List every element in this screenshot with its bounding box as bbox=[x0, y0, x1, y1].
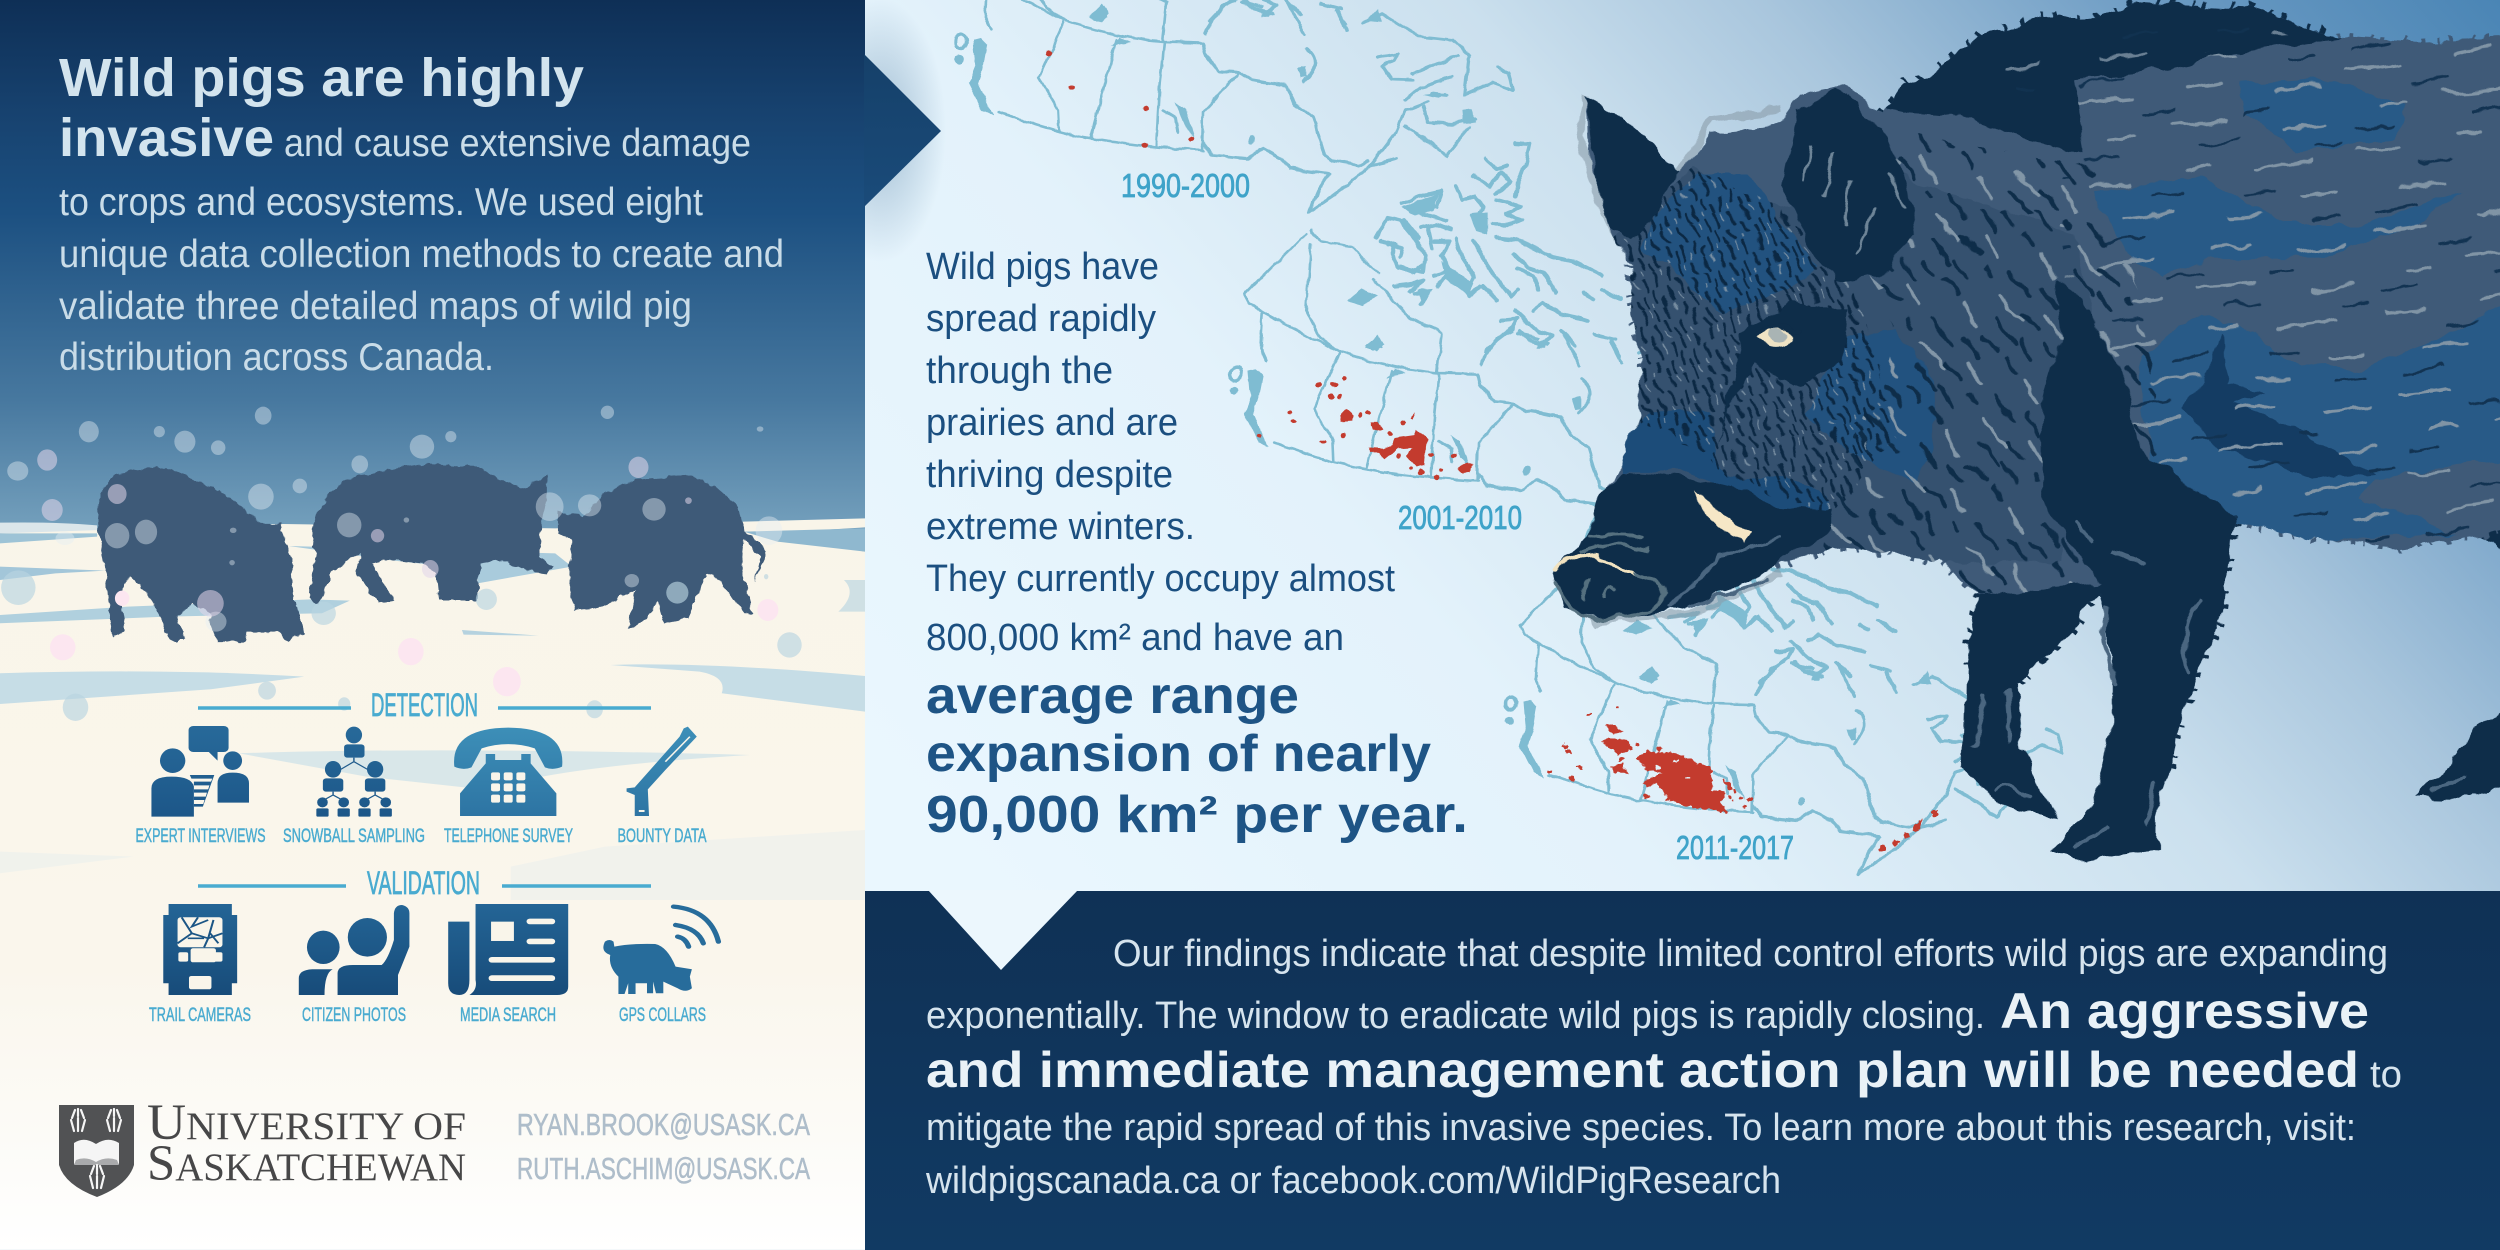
key statistic bbox=[926, 667, 1468, 844]
head and neck darkening bbox=[1616, 166, 2092, 566]
snow landscape bbox=[0, 518, 865, 1250]
findings text: wildpigscanada.ca or facebook.com/WildPigResearch bbox=[925, 1160, 1781, 1202]
intro text block: unique data collection methods to create and bbox=[59, 233, 784, 276]
map: Canada 2011-2017 bbox=[1505, 474, 2063, 874]
icon: newspaper bbox=[448, 904, 568, 995]
icon: shotgun bbox=[627, 727, 697, 816]
pig silhouette: grazing left bbox=[97, 467, 305, 642]
dark flank mark bbox=[2182, 334, 2374, 477]
icon: trail camera bbox=[163, 904, 237, 995]
intro text block: invasive bbox=[59, 108, 274, 168]
side text: spread: spread rapidly bbox=[926, 298, 1156, 340]
key statistic: expansion of nearly bbox=[926, 725, 1431, 783]
panel: right map area background bbox=[865, 0, 2500, 891]
labels: validation methods: MEDIA SEARCH bbox=[460, 1005, 556, 1026]
side text: spread: Wild pigs have bbox=[926, 246, 1159, 288]
intro text block: Wild pigs are highly bbox=[59, 48, 584, 108]
university wordmark: SASKATCHEWAN bbox=[147, 1136, 466, 1192]
side text: spread: through the bbox=[926, 350, 1113, 392]
findings text: to bbox=[2370, 1054, 2402, 1096]
findings text: and immediate management action plan will be needed bbox=[926, 1042, 2359, 1098]
side text: spread: 800,000 km² and have an bbox=[926, 617, 1344, 659]
grey fur edge bbox=[1557, 93, 1781, 624]
university wordmark: UNIVERSITY OF bbox=[147, 1095, 466, 1151]
head colour patches bbox=[1622, 172, 1936, 511]
notch pointer bbox=[928, 890, 1078, 970]
side text: spread: thriving despite bbox=[926, 454, 1173, 496]
side text: spread: They currently occupy almost bbox=[926, 558, 1395, 600]
fur strokes: flank bbox=[2061, 22, 2500, 556]
intro text block: distribution across Canada. bbox=[59, 336, 494, 379]
side text: spread: extreme winters. bbox=[926, 506, 1195, 548]
labels: validation methods: GPS COLLARS bbox=[619, 1005, 706, 1026]
labels: detection methods: EXPERT INTERVIEWS bbox=[136, 826, 266, 847]
map: Canada 2001-2010 bbox=[1230, 143, 1788, 543]
map label: 2001-2010: 2001-2010 bbox=[1398, 499, 1522, 536]
icon: expert interviews bbox=[151, 726, 249, 817]
findings text: exponentially. The window to eradicate wild pigs is rapidly closing. bbox=[926, 995, 1985, 1037]
contact emails: RYAN.BROOK@USASK.CA bbox=[517, 1107, 810, 1142]
clipped coat details bbox=[1608, 0, 2500, 861]
findings text: mitigate the rapid spread of this invasive species. To learn more about this research, visit: bbox=[926, 1107, 2356, 1149]
key statistic: average range bbox=[926, 667, 1299, 725]
far rear leg bbox=[2412, 530, 2500, 798]
icon: telephone bbox=[454, 728, 562, 816]
intro text block bbox=[59, 48, 784, 379]
map label: 1990-2000: 1990-2000 bbox=[1121, 167, 1250, 204]
map: Canada 1990-2000 bbox=[955, 0, 1513, 212]
mid-blue fur patches bbox=[2093, 79, 2500, 542]
side text: spread: prairies and are bbox=[926, 402, 1178, 444]
illustration: wild boar bbox=[1554, 0, 2500, 861]
key statistic: 90,000 km² per year. bbox=[926, 786, 1468, 844]
fur fringe: dark ridge and legs bbox=[1883, 2, 2336, 774]
dark chest and front legs bbox=[1962, 281, 2233, 861]
contact emails bbox=[517, 1107, 810, 1186]
fur strokes: neck bbox=[1819, 135, 2163, 595]
pig silhouette: standing centre bbox=[308, 463, 552, 605]
snout bbox=[1554, 471, 1832, 623]
wild pig range 2011-2017 bbox=[1547, 706, 1938, 852]
ear: right bbox=[1781, 90, 1915, 281]
leg details bbox=[1975, 522, 2463, 847]
labels: detection methods bbox=[136, 826, 707, 847]
body silhouette bbox=[1554, 2, 2500, 861]
falling snow bubbles bbox=[1, 406, 802, 721]
heading: validation: VALIDATION bbox=[367, 865, 480, 901]
heading: detection: DETECTION bbox=[371, 687, 478, 723]
fur strokes: head bbox=[1608, 168, 1895, 516]
labels: validation methods: TRAIL CAMERAS bbox=[149, 1005, 251, 1026]
icon: university shield bbox=[59, 1105, 134, 1197]
labels: validation methods: CITIZEN PHOTOS bbox=[302, 1005, 406, 1026]
tusk bbox=[1691, 488, 1753, 543]
labels: detection methods: SNOWBALL SAMPLING bbox=[283, 826, 425, 847]
findings text: Our findings indicate that despite limited control efforts wild pigs are expanding bbox=[1113, 933, 2388, 975]
labels: detection methods: TELEPHONE SURVEY bbox=[444, 826, 573, 847]
fur fringe: back and belly bbox=[1631, 36, 2500, 595]
panel: findings bar bbox=[865, 890, 2500, 1250]
intro text block: to crops and ecosystems. We used eight bbox=[59, 181, 703, 224]
ear: left bbox=[1586, 93, 1682, 241]
intro text block: validate three detailed maps of wild pig bbox=[59, 285, 692, 328]
nose rim and nostrils bbox=[1557, 534, 1781, 622]
intro text block: and cause extensive damage bbox=[284, 122, 751, 165]
dark back ridge bbox=[1883, 0, 2342, 154]
pig silhouette: grazing right bbox=[558, 475, 767, 630]
eye patch bbox=[1717, 306, 1848, 449]
contact emails: RUTH.ASCHIM@USASK.CA bbox=[517, 1151, 810, 1186]
left panel background bbox=[0, 0, 866, 1250]
side text: spread bbox=[926, 246, 1395, 659]
three wild pig silhouettes bbox=[97, 463, 767, 642]
fur strokes: back ridge bbox=[2005, 30, 2288, 72]
icon: citizen photos bbox=[299, 905, 409, 995]
findings text: An aggressive bbox=[2000, 983, 2369, 1039]
arrow pointing to the maps bbox=[864, 54, 941, 207]
icon: snowball sampling bbox=[316, 727, 392, 817]
labels: validation methods bbox=[149, 1005, 706, 1026]
eye bbox=[1758, 325, 1800, 347]
map label: 2011-2017: 2011-2017 bbox=[1676, 829, 1794, 866]
icon: pig with GPS collar bbox=[603, 907, 718, 994]
university wordmark bbox=[147, 1095, 466, 1192]
labels: detection methods: BOUNTY DATA bbox=[618, 826, 707, 847]
findings text bbox=[925, 933, 2402, 1202]
